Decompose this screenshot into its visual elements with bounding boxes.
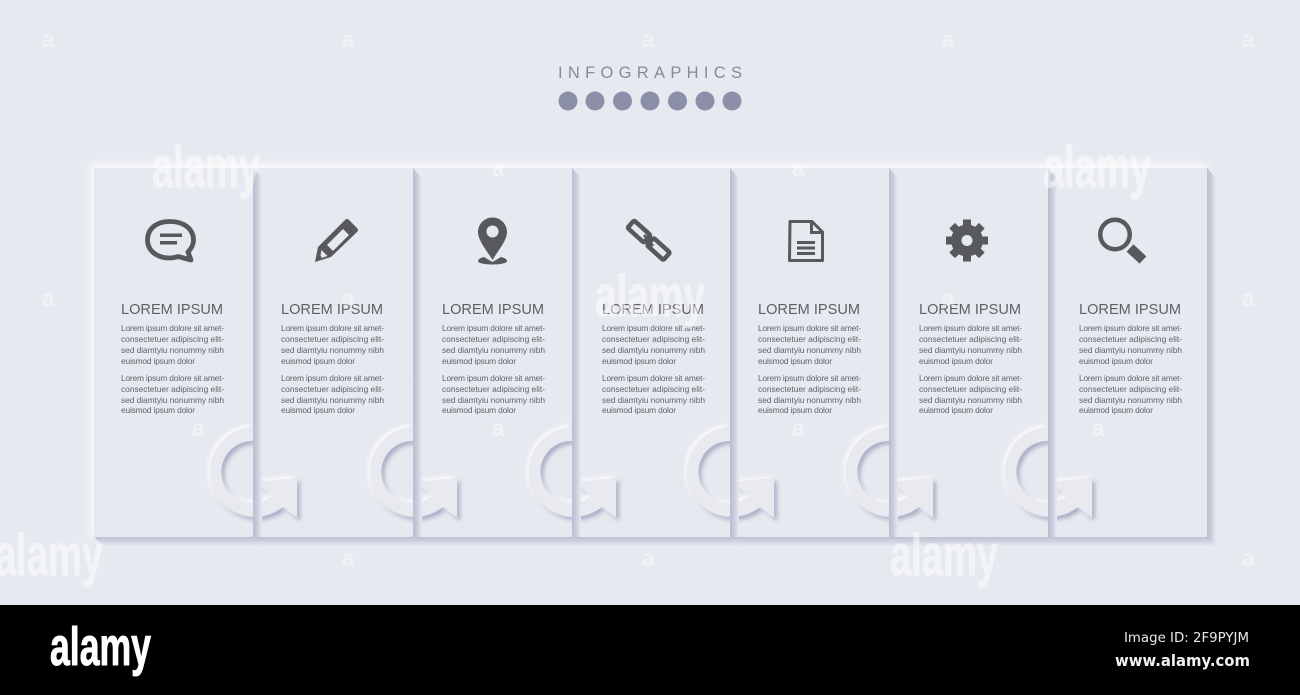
text block: panel 1: sed diamtyiu nonummy nibh: [121, 345, 224, 355]
icon: magnifier: [1100, 220, 1143, 260]
icon: pencil: [315, 219, 358, 262]
watermark: small marks: a: [492, 415, 505, 441]
text block: panel 1: euismod ipsum dolor: [121, 356, 195, 366]
watermark: large words: alamy: [890, 523, 998, 588]
text block: panel 1: LOREM IPSUM: [121, 301, 223, 318]
icon: document: [790, 222, 822, 260]
text block: panel 5: LOREM IPSUM: [758, 301, 860, 318]
text block: panel 5: euismod ipsum dolor: [758, 356, 832, 366]
text block: panel 6: sed diamtyiu nonummy nibh: [919, 395, 1022, 405]
watermark: small marks: a: [342, 545, 355, 571]
text block: panel 5: sed diamtyiu nonummy nibh: [758, 345, 861, 355]
arrow 1 ring on panel 1: [208, 425, 253, 522]
watermark: small marks: a: [192, 415, 205, 441]
text block: panel 6: consectetuer adipiscing elit-: [919, 384, 1022, 394]
text block: panel 3: consectetuer adipiscing elit-: [442, 334, 545, 344]
text block: panel 5: Lorem ipsum dolore sit amet-: [758, 373, 861, 383]
watermark: large words: alamy: [1043, 135, 1151, 200]
text block: panel 2: [281, 301, 384, 415]
panel strip with curved arrows: [94, 168, 1216, 546]
text block: panel 6: euismod ipsum dolor: [919, 405, 993, 415]
arrow 6 ring on panel 6: [1002, 425, 1048, 522]
image id: Image ID: 2F9PYJM: [1124, 630, 1249, 646]
arrow 2 ring on panel 2: [368, 425, 413, 522]
watermark: small marks: a: [1092, 415, 1105, 441]
text block: panel 4: euismod ipsum dolor: [602, 405, 676, 415]
watermark: small marks: a: [1242, 285, 1255, 311]
text block: panel 4: euismod ipsum dolor: [602, 356, 676, 366]
text block: panel 2: euismod ipsum dolor: [281, 405, 355, 415]
watermark: small marks: a: [642, 26, 655, 52]
text block: panel 2: LOREM IPSUM: [281, 301, 383, 318]
watermark: small marks: a: [942, 26, 955, 52]
watermark: large words: alamy: [152, 135, 260, 200]
text block: panel 4: Lorem ipsum dolore sit amet-: [602, 323, 705, 333]
text block: panel 7: euismod ipsum dolor: [1079, 405, 1153, 415]
step indicator dots: [558, 92, 742, 110]
text block: panel 7: Lorem ipsum dolore sit amet-: [1079, 373, 1182, 383]
text block: panel 6: consectetuer adipiscing elit-: [919, 334, 1022, 344]
arrow 4 ring on panel 4: [684, 425, 730, 522]
icon: gear: [946, 220, 988, 262]
text block: panel 5: [758, 301, 861, 415]
watermark: small marks: a: [792, 415, 805, 441]
watermark: small marks: a: [342, 285, 355, 311]
text block: panel 4: consectetuer adipiscing elit-: [602, 334, 705, 344]
text block: panel 3: [442, 301, 545, 415]
text block: panel 6: Lorem ipsum dolore sit amet-: [919, 323, 1022, 333]
text block: panel 1: Lorem ipsum dolore sit amet-: [121, 323, 224, 333]
text block: panel 4: LOREM IPSUM: [602, 301, 704, 318]
text block: panel 7: sed diamtyiu nonummy nibh: [1079, 395, 1182, 405]
title: INFOGRAPHICS: [558, 64, 742, 82]
text block: panel 2: euismod ipsum dolor: [281, 356, 355, 366]
arrow 1 head on panel 2: [210, 427, 297, 518]
panel 3: [413, 168, 581, 546]
panel 6: [889, 168, 1057, 546]
text block: panel 6: sed diamtyiu nonummy nibh: [919, 345, 1022, 355]
watermark: small marks: a: [1242, 26, 1255, 52]
text block: panel 1: euismod ipsum dolor: [121, 405, 195, 415]
text block: panel 2: sed diamtyiu nonummy nibh: [281, 395, 384, 405]
arrow 5 ring on panel 5: [844, 425, 889, 522]
text block: panel 7: euismod ipsum dolor: [1079, 356, 1153, 366]
text block: panel 2: consectetuer adipiscing elit-: [281, 334, 384, 344]
text block: panel 7: sed diamtyiu nonummy nibh: [1079, 345, 1182, 355]
icon: map pin: [478, 218, 507, 264]
watermark: small marks: a: [1242, 545, 1255, 571]
text block: panel 3: Lorem ipsum dolore sit amet-: [442, 323, 545, 333]
watermark: large words: [0, 135, 1151, 588]
text block: panel 7: [1079, 301, 1182, 415]
panel 1: [94, 168, 262, 546]
text block: panel 1: consectetuer adipiscing elit-: [121, 384, 224, 394]
text block: panel 3: sed diamtyiu nonummy nibh: [442, 345, 545, 355]
arrow 3 ring on panel 3: [526, 425, 572, 522]
panel 5: [730, 168, 898, 546]
text block: panel 7: LOREM IPSUM: [1079, 301, 1181, 318]
text block: panel 3: LOREM IPSUM: [442, 301, 544, 318]
text block: panel 1: sed diamtyiu nonummy nibh: [121, 395, 224, 405]
white glow behind panels: [91, 164, 1207, 537]
arrow 4 head on panel 5: [687, 427, 774, 518]
footer logo: alamy: [50, 617, 151, 677]
watermark: small marks: a: [792, 155, 805, 181]
icon: chat bubble: [148, 222, 194, 260]
text block: panel 7: consectetuer adipiscing elit-: [1079, 384, 1182, 394]
text block: panel 5: Lorem ipsum dolore sit amet-: [758, 323, 861, 333]
text block: panel 4: sed diamtyiu nonummy nibh: [602, 395, 705, 405]
text block: panel 1: [121, 301, 224, 415]
footer bar: [0, 605, 1300, 695]
text block: panel 5: euismod ipsum dolor: [758, 405, 832, 415]
text block: panel 6: euismod ipsum dolor: [919, 356, 993, 366]
arrow 5 head on panel 6: [846, 427, 933, 518]
text block: panel 5: sed diamtyiu nonummy nibh: [758, 395, 861, 405]
text block: panel 4: sed diamtyiu nonummy nibh: [602, 345, 705, 355]
arrow 6 head on panel 7: [1005, 427, 1092, 518]
watermark: large words: alamy: [595, 264, 705, 329]
text block: panel 4: [602, 301, 705, 415]
text block: panel 5: consectetuer adipiscing elit-: [758, 334, 861, 344]
arrow 2 head on panel 3: [370, 427, 457, 518]
text block: panel 3: euismod ipsum dolor: [442, 356, 516, 366]
watermark: small marks: a: [642, 545, 655, 571]
text block: panel 1: consectetuer adipiscing elit-: [121, 334, 224, 344]
text block: panel 3: euismod ipsum dolor: [442, 405, 516, 415]
watermark: small marks: a: [492, 155, 505, 181]
text block: panel 2: consectetuer adipiscing elit-: [281, 384, 384, 394]
text block: panel 6: Lorem ipsum dolore sit amet-: [919, 373, 1022, 383]
text block: panel 7: Lorem ipsum dolore sit amet-: [1079, 323, 1182, 333]
text block: panel 7: consectetuer adipiscing elit-: [1079, 334, 1182, 344]
arrow 3 head on panel 4: [529, 427, 616, 518]
text block: panel 3: Lorem ipsum dolore sit amet-: [442, 373, 545, 383]
panel 7: [1048, 168, 1216, 546]
icon: chain link: [627, 220, 670, 260]
watermark: small marks: [42, 26, 1255, 571]
text block: panel 3: consectetuer adipiscing elit-: [442, 384, 545, 394]
text block: panel 2: Lorem ipsum dolore sit amet-: [281, 323, 384, 333]
text block: panel 4: consectetuer adipiscing elit-: [602, 384, 705, 394]
text block: panel 6: [919, 301, 1022, 415]
text block: panel 1: Lorem ipsum dolore sit amet-: [121, 373, 224, 383]
panel 2: [253, 168, 422, 546]
text block: panel 2: Lorem ipsum dolore sit amet-: [281, 373, 384, 383]
text block: panel 6: LOREM IPSUM: [919, 301, 1021, 318]
watermark: small marks: a: [42, 26, 55, 52]
text block: panel 2: sed diamtyiu nonummy nibh: [281, 345, 384, 355]
text block: panel 4: Lorem ipsum dolore sit amet-: [602, 373, 705, 383]
text block: panel 3: sed diamtyiu nonummy nibh: [442, 395, 545, 405]
panel 4: [572, 168, 739, 546]
watermark: small marks: a: [342, 26, 355, 52]
watermark: small marks: a: [42, 285, 55, 311]
text block: panel 5: consectetuer adipiscing elit-: [758, 384, 861, 394]
watermark: small marks: a: [942, 285, 955, 311]
website: www.alamy.com: [1115, 651, 1250, 670]
